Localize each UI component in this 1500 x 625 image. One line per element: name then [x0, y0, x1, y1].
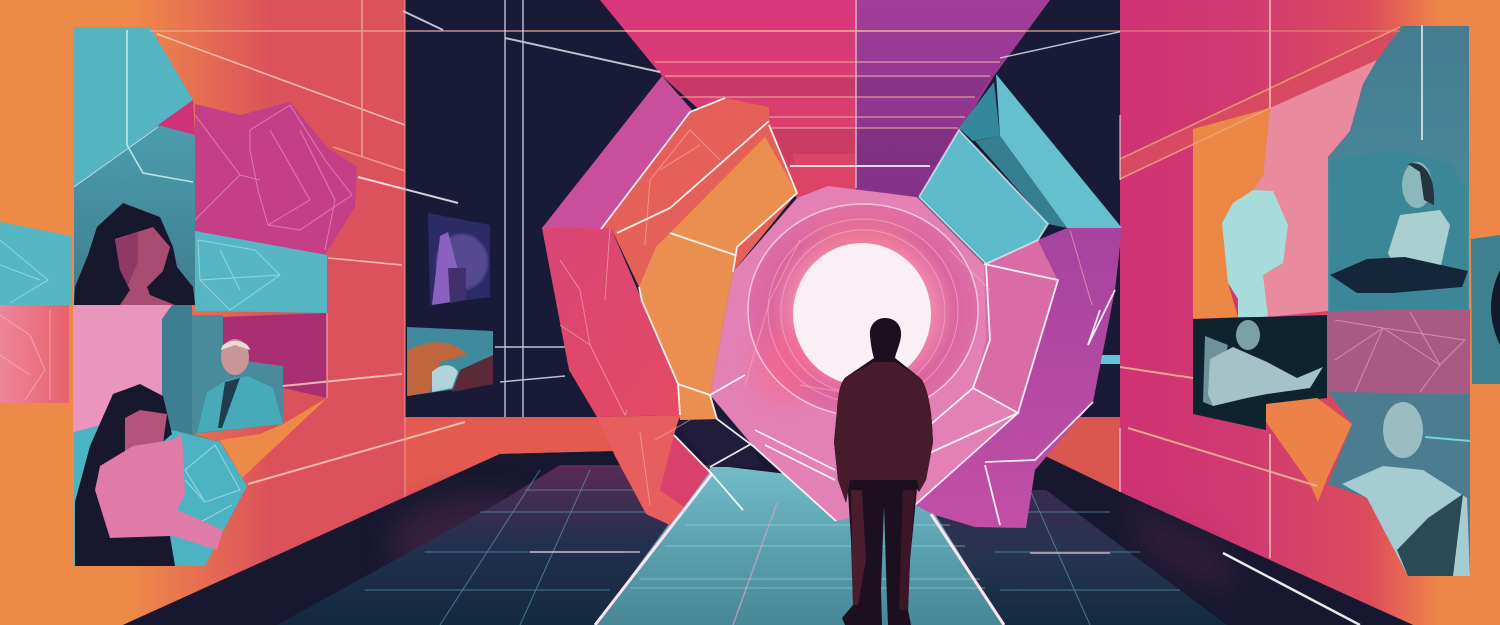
ceiling	[600, 0, 1050, 198]
facet: teal	[919, 74, 1122, 264]
facet: dark gap	[674, 418, 765, 467]
floor tiles: left	[277, 465, 720, 625]
facet: orange	[639, 137, 797, 420]
man silhouette	[834, 318, 933, 625]
portrait: bald man with glasses	[1328, 392, 1470, 576]
panel: teal strip	[195, 231, 327, 313]
rings	[748, 204, 978, 416]
icon: pale teal bust	[1222, 190, 1288, 317]
panel: salmon	[1253, 60, 1377, 317]
band under back wall	[1045, 417, 1120, 492]
portrait: man in chair	[1193, 315, 1327, 430]
facet lines	[601, 98, 1115, 525]
panel: upper teal	[74, 27, 195, 305]
panel: red top wedge	[1120, 26, 1402, 179]
panel: teal column	[1328, 26, 1469, 311]
picture: purple figure	[428, 213, 490, 305]
facet: pink upper left	[542, 76, 692, 229]
panel: orange slab	[1193, 108, 1270, 319]
picture: teal with orange	[407, 327, 493, 396]
facet: left red	[542, 228, 680, 417]
faceted portal	[542, 74, 1122, 528]
floor	[123, 451, 1413, 625]
portrait: dark haired woman	[74, 203, 195, 305]
facet: purple	[915, 228, 1122, 528]
panel: left tiles	[0, 222, 327, 478]
wall light lines	[74, 0, 1120, 497]
facet: pink body	[710, 186, 1058, 521]
band under back wall	[405, 417, 620, 495]
panel: magenta gem	[195, 102, 357, 255]
facet: pink right	[973, 240, 1058, 413]
portrait: woman at desk	[1330, 150, 1468, 311]
facet: coral backing	[601, 98, 797, 420]
facet: lower coral	[597, 415, 710, 525]
left wall	[0, 0, 1120, 625]
back wall pictures	[403, 0, 1192, 417]
portrait: man in teal suit	[197, 339, 283, 433]
portrait: woman in pink	[74, 384, 247, 566]
panel: orange shard	[1266, 398, 1352, 502]
panel: right edge tile	[1471, 235, 1500, 384]
right wall	[1045, 0, 1500, 625]
walkway	[595, 465, 1004, 625]
floor tiles: right	[920, 490, 1227, 625]
panel: mauve shatter tile	[1328, 309, 1470, 394]
portal light	[793, 243, 931, 385]
